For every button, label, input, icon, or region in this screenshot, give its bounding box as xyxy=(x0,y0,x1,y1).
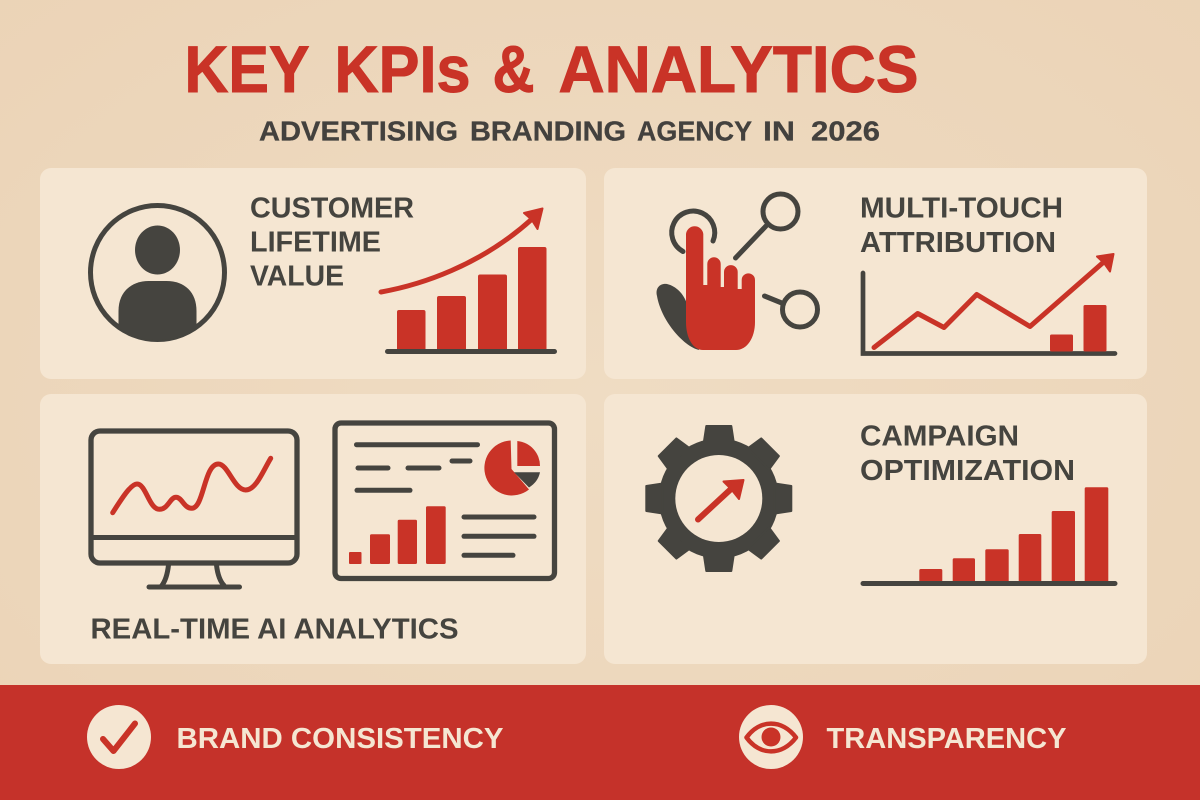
label: brand consistency: BRAND CONSISTENCY xyxy=(176,723,504,755)
heading: multi-touch attribution xyxy=(860,192,1063,259)
icon: customer avatar xyxy=(90,206,224,340)
heading: customer lifetime value: LIFETIME xyxy=(250,226,381,258)
heading: campaign optimization: CAMPAIGN xyxy=(860,420,1019,452)
heading: multi-touch attribution: MULTI-TOUCH xyxy=(860,192,1063,224)
heading: multi-touch attribution: ATTRIBUTION xyxy=(860,227,1056,259)
icon: touch hand xyxy=(657,194,818,350)
heading: customer lifetime value: CUSTOMER xyxy=(250,192,414,224)
heading: customer lifetime value xyxy=(250,192,414,292)
title: & xyxy=(492,32,534,106)
title: KPIs xyxy=(334,32,470,106)
icon: dashboard report xyxy=(335,423,554,578)
subtitle xyxy=(259,116,880,146)
heading: customer lifetime value: VALUE xyxy=(250,260,344,292)
icon: eye xyxy=(739,705,803,769)
icon: check mark xyxy=(87,705,151,769)
panel: real-time AI analytics xyxy=(40,394,586,664)
subtitle: ADVERTISING xyxy=(259,116,458,146)
chart: rising bars xyxy=(860,487,1118,586)
subtitle: BRANDING xyxy=(470,116,626,146)
heading: campaign optimization xyxy=(860,420,1075,487)
heading: campaign optimization: OPTIMIZATION xyxy=(860,455,1075,487)
subtitle: AGENCY xyxy=(637,116,752,146)
icon: monitor with line chart xyxy=(90,431,298,587)
chart: line and bars xyxy=(863,254,1115,354)
chart: rising bars with arrow xyxy=(381,208,557,354)
footer band xyxy=(0,685,1200,800)
panel: campaign optimization xyxy=(604,394,1147,664)
title: KEY xyxy=(184,32,310,106)
icon: gear with arrow xyxy=(646,426,791,571)
label: real-time AI analytics: REAL-TIME AI ANALYTICS xyxy=(90,613,458,645)
title: ANALYTICS xyxy=(558,32,918,106)
label: transparency: TRANSPARENCY xyxy=(826,723,1066,755)
subtitle: 2026 xyxy=(811,116,880,146)
title xyxy=(184,32,918,106)
subtitle: IN xyxy=(763,116,795,146)
panel: customer lifetime value xyxy=(40,168,586,379)
panel: multi-touch attribution xyxy=(604,168,1147,379)
